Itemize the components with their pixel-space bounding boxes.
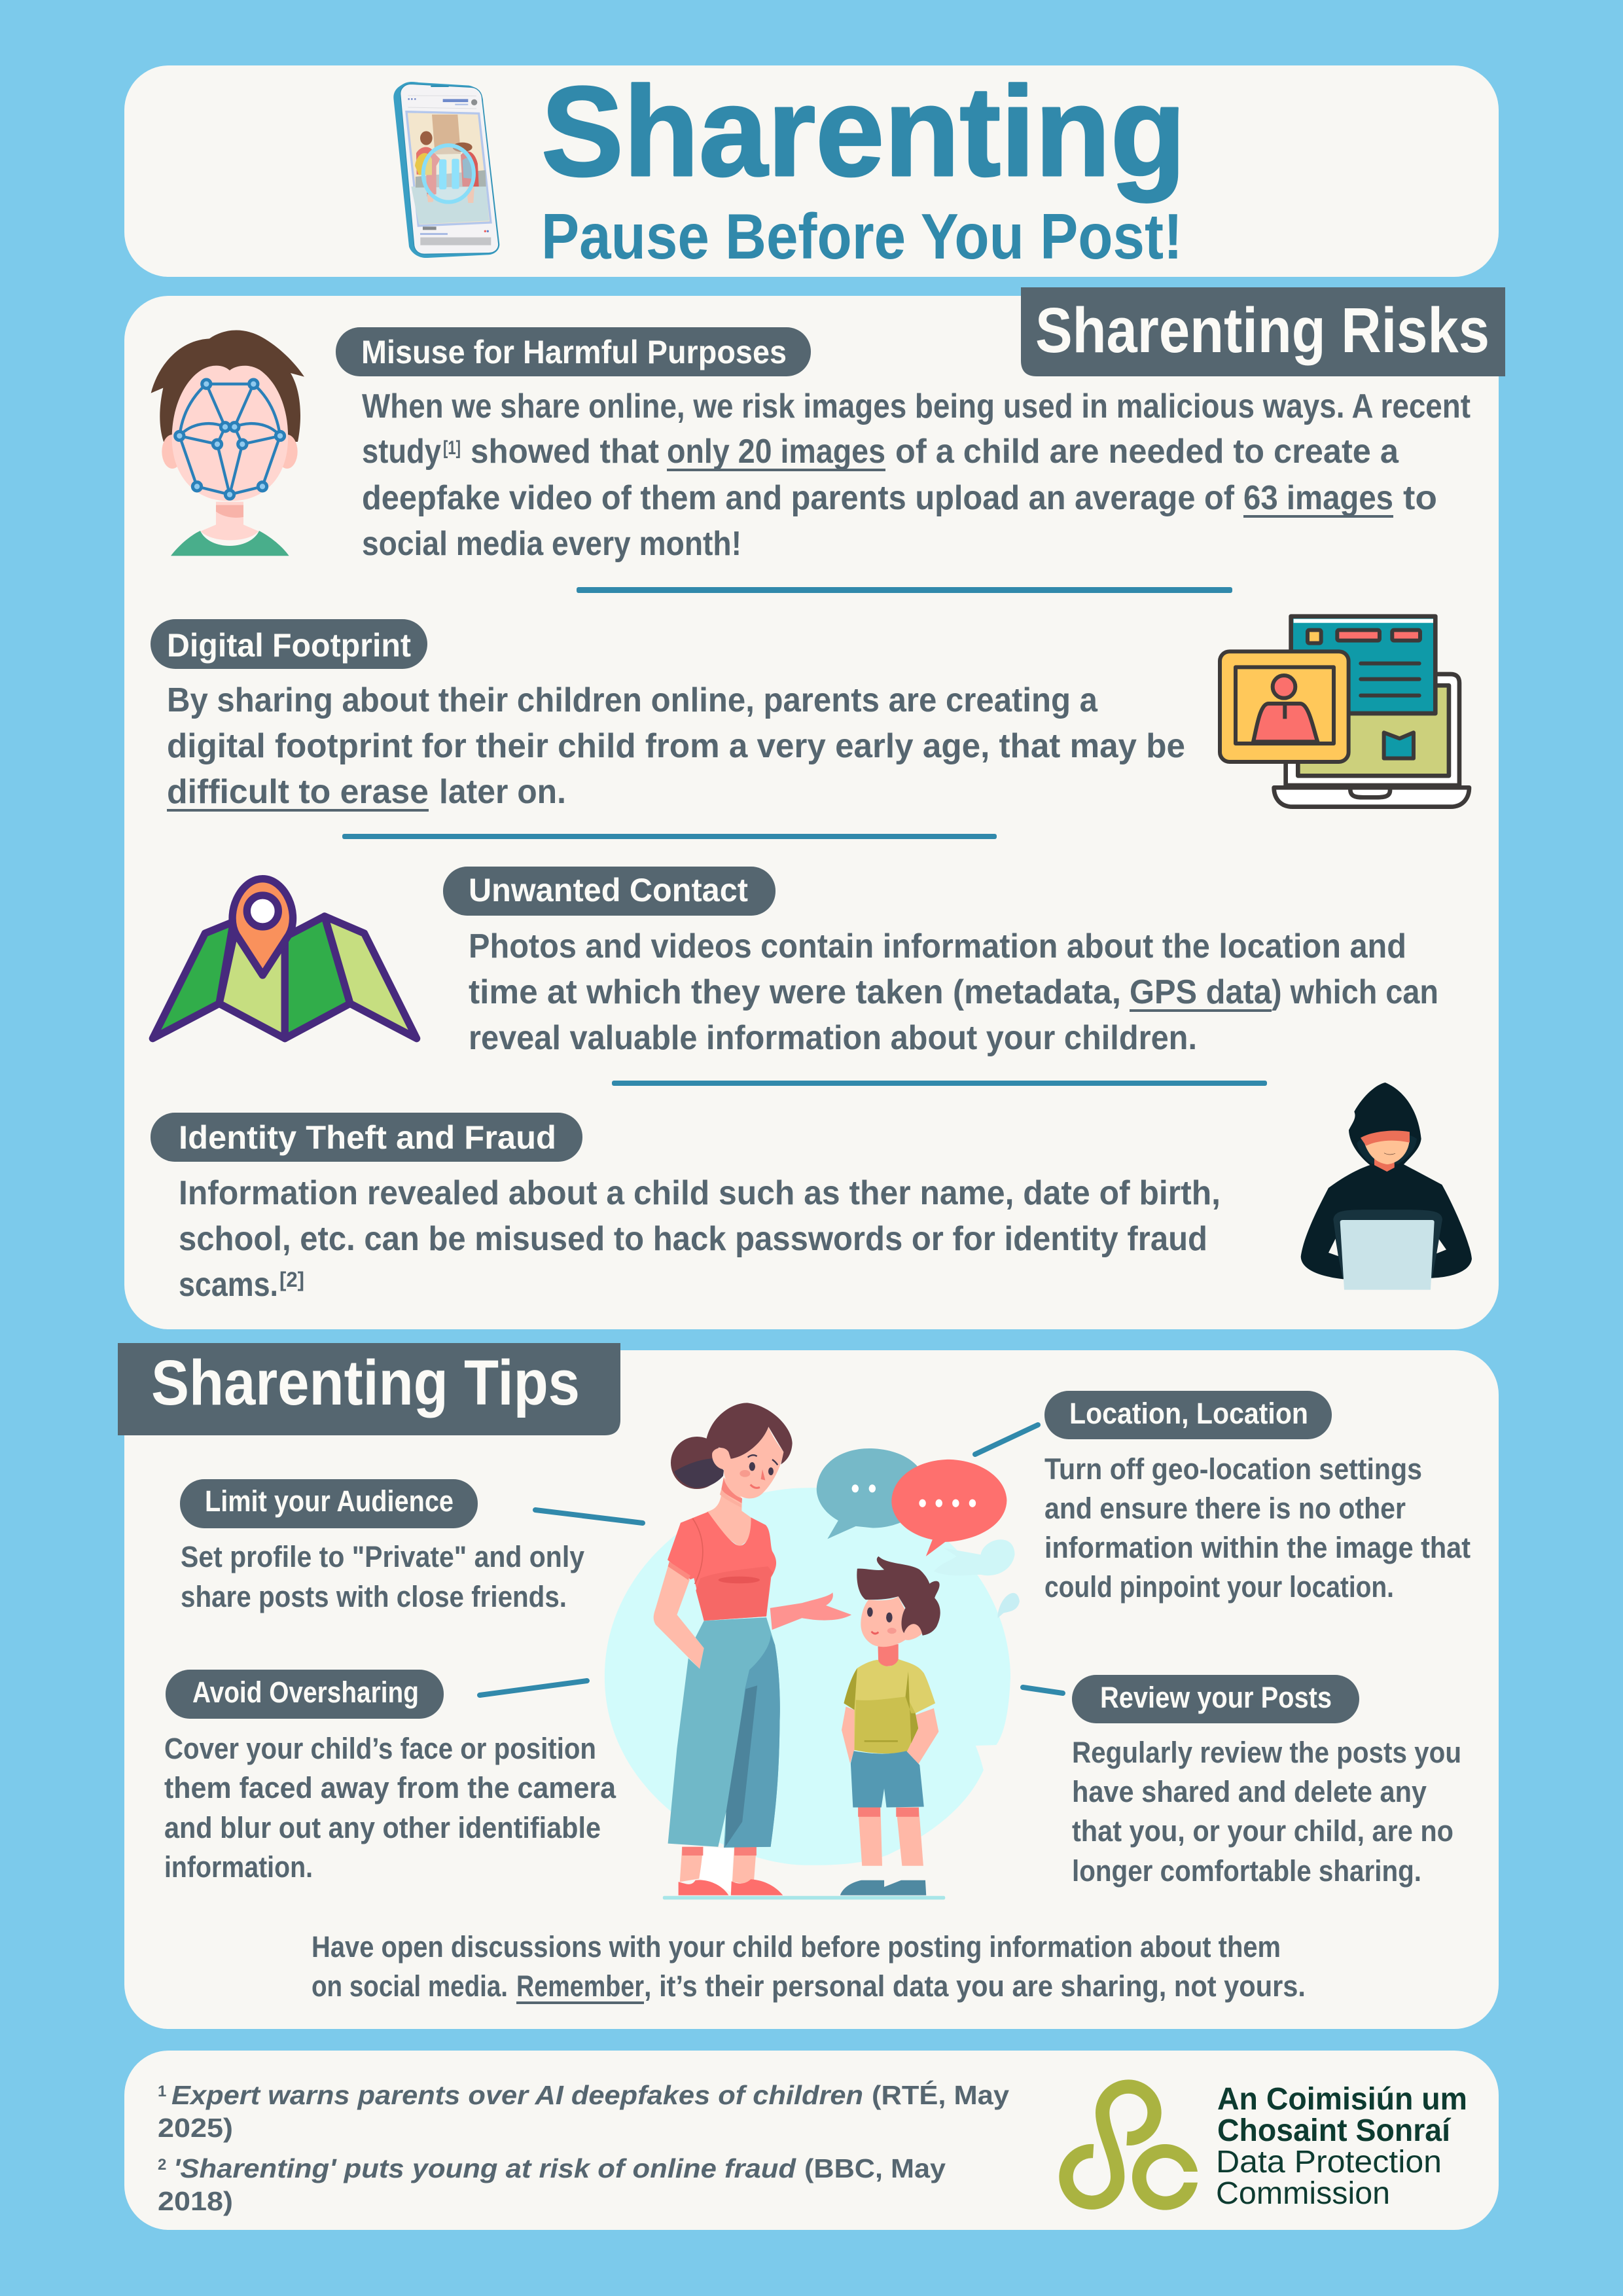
risk: unwanted contact: time at which they were taken (metadata, xyxy=(469,973,1121,1011)
risk: misuse for harmful purposes: Misuse for Harmful Purposes xyxy=(361,334,787,370)
icon: laptop with browser windows xyxy=(1220,617,1469,807)
references xyxy=(158,2080,1009,2216)
child xyxy=(840,1556,940,1895)
arrow: to limit your audience xyxy=(535,1510,643,1523)
icon: phone with pause button xyxy=(393,82,499,258)
risk: misuse for harmful purposes: [1] xyxy=(443,437,461,459)
subtitle: Pause Before You Post! xyxy=(541,200,1183,272)
references: Expert warns parents over AI deepfakes of children xyxy=(171,2080,863,2110)
risk: digital footprint xyxy=(151,619,1185,812)
closing note: , it’s their personal data you are sharing, not yours. xyxy=(644,1969,1306,2003)
arrow: to review your posts xyxy=(1023,1687,1063,1693)
logo: data protection commission: Chosaint Sonraí xyxy=(1217,2113,1452,2148)
closing note xyxy=(312,1930,1306,2004)
risk: unwanted contact: GPS data xyxy=(1130,973,1272,1011)
risk: misuse for harmful purposes: to xyxy=(1403,479,1437,517)
tip: avoid oversharing: information. xyxy=(164,1850,313,1884)
risk: identity theft and fraud: Identity Theft and Fraud xyxy=(179,1119,556,1156)
logo: data protection commission: Commission xyxy=(1216,2176,1390,2211)
tip: avoid oversharing: and blur out any other identifiable xyxy=(164,1811,601,1844)
risk: digital footprint: difficult to erase xyxy=(167,773,429,811)
closing note: on social media. xyxy=(312,1969,508,2003)
risk: identity theft and fraud: Information revealed about a child such as ther name, date of birth, xyxy=(179,1174,1221,1212)
illustration: mother talking with child xyxy=(605,1403,1020,1899)
tip: avoid oversharing: Cover your child’s face or position xyxy=(164,1732,596,1765)
tip: location, location: information within the image that xyxy=(1044,1531,1471,1564)
risk: unwanted contact: reveal valuable information about your children. xyxy=(469,1019,1197,1057)
references: 2 xyxy=(158,2156,166,2174)
tip: location, location: Location, Location xyxy=(1069,1397,1308,1430)
risk: misuse for harmful purposes xyxy=(336,327,1471,563)
mother: arms and trousers xyxy=(654,1565,851,1895)
panel: header xyxy=(124,60,1499,277)
risk: misuse for harmful purposes: study xyxy=(362,433,441,471)
closing note: Have open discussions with your child before posting information about them xyxy=(312,1930,1281,1964)
tip: review your posts: longer comfortable sharing. xyxy=(1072,1854,1421,1888)
heading: sharenting tips: Sharenting Tips xyxy=(151,1347,580,1418)
risk: unwanted contact: ) which can xyxy=(1272,973,1438,1011)
risk: digital footprint: digital footprint for their child from a very early age, that may be xyxy=(167,727,1185,765)
tip: review your posts xyxy=(1072,1675,1461,1888)
logo: data protection commission xyxy=(1066,2082,1467,2211)
tip: review your posts: that you, or your child, are no xyxy=(1072,1814,1454,1848)
risk: unwanted contact: Photos and videos contain information about the location and xyxy=(469,927,1406,965)
tip: limit your audience: Limit your Audience xyxy=(205,1484,454,1518)
panel: references and logo xyxy=(124,2051,1499,2230)
references: 2025) xyxy=(158,2113,233,2143)
background blob xyxy=(605,1488,1010,1865)
tip: location, location: and ensure there is no other xyxy=(1044,1492,1406,1525)
logo: data protection commission: Data Protection xyxy=(1216,2145,1442,2179)
tip: review your posts: Regularly review the posts you xyxy=(1072,1736,1461,1769)
tip: location, location: Turn off geo-location settings xyxy=(1044,1452,1422,1486)
tip: avoid oversharing: them faced away from the camera xyxy=(164,1771,616,1804)
heading: sharenting risks: Sharenting Risks xyxy=(1035,295,1489,366)
title: Sharenting xyxy=(541,60,1186,203)
references: (BBC, May xyxy=(804,2153,946,2183)
tip: limit your audience xyxy=(180,1479,584,1613)
references: 1 xyxy=(158,2083,166,2100)
risk: identity theft and fraud: school, etc. can be misused to hack passwords or for identity fraud xyxy=(179,1220,1207,1258)
tip: location, location xyxy=(1044,1391,1471,1604)
panel: sharenting risks xyxy=(124,287,1505,1329)
risk: misuse for harmful purposes: deepfake video of them and parents upload an average of xyxy=(362,479,1235,517)
risk: identity theft and fraud: [2] xyxy=(279,1268,304,1291)
risk: digital footprint: Digital Footprint xyxy=(167,627,411,664)
risk: digital footprint: By sharing about their children online, parents are creating a xyxy=(167,681,1098,719)
logo: data protection commission: An Coimisiún um xyxy=(1217,2082,1467,2117)
closing note: Remember xyxy=(516,1969,644,2003)
icon: face with recognition mesh xyxy=(151,331,304,556)
panel: sharenting tips xyxy=(118,1343,1499,2029)
risk: misuse for harmful purposes: showed that xyxy=(471,433,659,471)
tip: avoid oversharing: Avoid Oversharing xyxy=(192,1676,419,1709)
mother: head and shirt xyxy=(668,1403,793,1621)
risk: misuse for harmful purposes: 63 images xyxy=(1243,479,1393,517)
references: 2018) xyxy=(158,2186,233,2216)
risk: identity theft and fraud xyxy=(151,1113,1221,1304)
tip: location, location: could pinpoint your location. xyxy=(1044,1570,1394,1604)
risk: misuse for harmful purposes: only 20 images xyxy=(667,433,885,471)
arrow: to location, location xyxy=(975,1425,1038,1454)
tip: avoid oversharing xyxy=(164,1670,616,1884)
references: (RTÉ, May xyxy=(872,2080,1009,2110)
tip: review your posts: have shared and delete any xyxy=(1072,1775,1427,1808)
risk: identity theft and fraud: scams. xyxy=(179,1266,278,1304)
speech bubble: blue xyxy=(817,1448,927,1539)
tip: limit your audience: share posts with close friends. xyxy=(181,1580,567,1613)
tip: review your posts: Review your Posts xyxy=(1100,1681,1332,1714)
risk: misuse for harmful purposes: social media every month! xyxy=(362,525,741,563)
arrow: to avoid oversharing xyxy=(480,1681,587,1695)
risk: unwanted contact xyxy=(443,867,1438,1057)
tip: limit your audience: Set profile to "Private" and only xyxy=(181,1540,584,1573)
risk: misuse for harmful purposes: When we share online, we risk images being used in malicious ways. A recent xyxy=(362,387,1471,425)
speech bubble: red xyxy=(891,1460,1007,1556)
icon: hooded hacker at laptop xyxy=(1301,1083,1472,1290)
references: 'Sharenting' puts young at risk of online fraud xyxy=(173,2153,796,2183)
icon: folded map with location pin xyxy=(152,879,417,1039)
risk: digital footprint: later on. xyxy=(439,773,566,811)
risk: unwanted contact: Unwanted Contact xyxy=(469,872,748,908)
risk: misuse for harmful purposes: of a child are needed to create a xyxy=(895,433,1399,471)
